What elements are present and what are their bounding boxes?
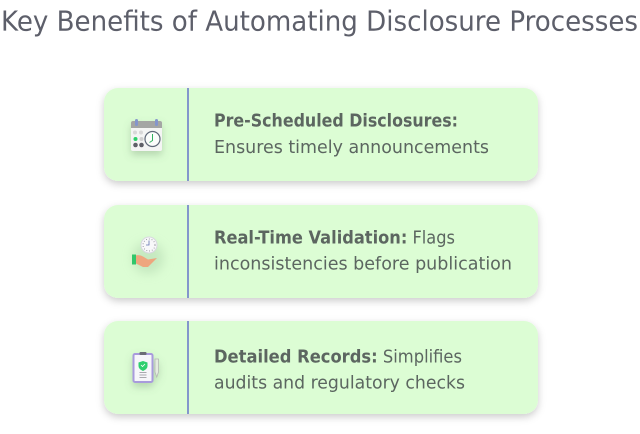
text: pre-scheduled: Pre-Scheduled Disclosures: bbox=[214, 110, 458, 132]
divider bbox=[187, 321, 189, 414]
panel: pre-scheduled disclosures bbox=[104, 88, 538, 181]
icon: clipboard with shield bbox=[134, 352, 158, 382]
text: detailed records: Detailed Records: Simplifies bbox=[214, 346, 462, 368]
panel: detailed records bbox=[104, 321, 538, 414]
card background bbox=[104, 321, 538, 414]
card background bbox=[104, 88, 538, 181]
text: real-time validation bbox=[214, 228, 512, 274]
icon: hand holding clock bbox=[132, 237, 164, 274]
text: real-time validation: inconsistencies before publication bbox=[214, 254, 512, 274]
text: detailed records: audits and regulatory checks bbox=[214, 372, 465, 394]
icon: calendar with clock bbox=[131, 119, 162, 151]
text: detailed records bbox=[214, 346, 465, 394]
divider bbox=[187, 88, 189, 181]
text: pre-scheduled: Ensures timely announcements bbox=[214, 137, 489, 158]
divider bbox=[187, 205, 189, 298]
text: pre-scheduled bbox=[214, 110, 489, 158]
panel: real-time validation bbox=[104, 205, 538, 298]
text: real-time validation: Real-Time Validation: Flags bbox=[214, 228, 455, 248]
card background bbox=[104, 205, 538, 298]
